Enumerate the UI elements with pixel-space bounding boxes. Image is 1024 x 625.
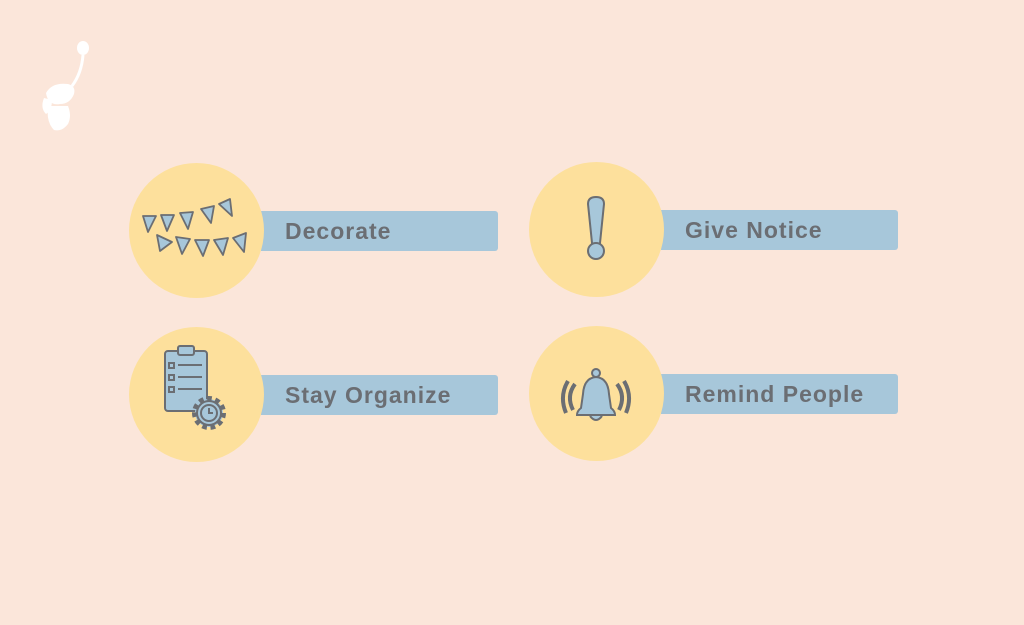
label bar: Decorate	[261, 211, 498, 251]
label bar: Give Notice	[661, 210, 898, 250]
label bar: Give Notice: Give Notice	[685, 217, 823, 243]
label bar: Decorate: Decorate	[285, 218, 391, 244]
logo: elephant with balloon	[42, 41, 89, 130]
item: Give Notice	[529, 162, 898, 297]
item: Stay Organize	[129, 327, 498, 462]
label bar: Stay Organize	[261, 375, 498, 415]
icon: clipboard with gear	[129, 327, 264, 462]
label bar: Stay Organize: Stay Organize	[285, 382, 451, 408]
item: Decorate	[129, 163, 498, 298]
item: Remind People	[529, 326, 898, 461]
icon: ringing bell	[529, 326, 664, 461]
label bar: Remind People: Remind People	[685, 381, 864, 407]
label bar: Remind People	[661, 374, 898, 414]
icon: bunting flags	[129, 163, 264, 298]
icon: exclamation mark	[529, 162, 664, 297]
